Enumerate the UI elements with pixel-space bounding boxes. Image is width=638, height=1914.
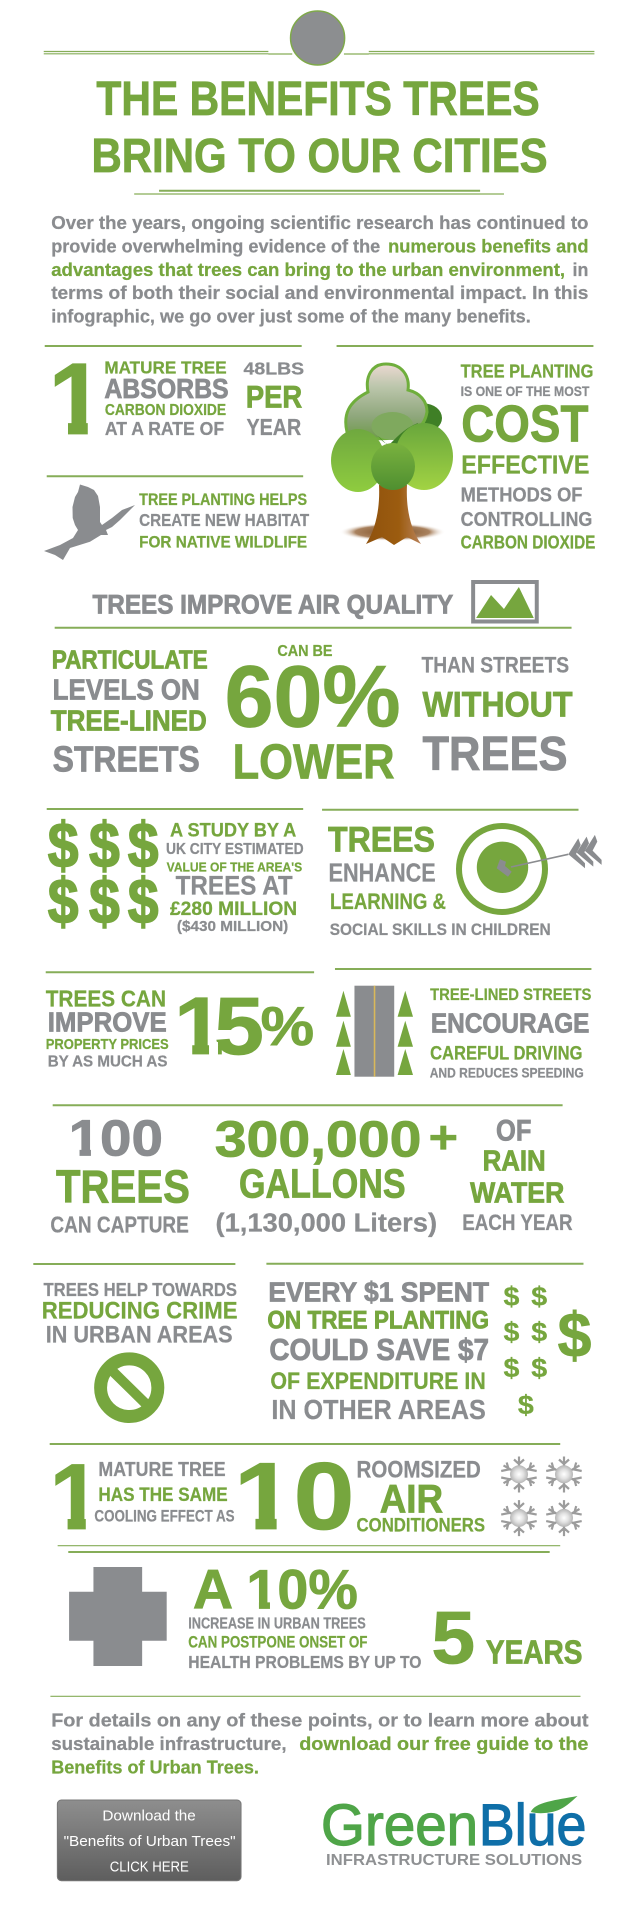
icon: small and large dollar signs: $: [531, 1281, 547, 1312]
panel: property prices: BY AS MUCH AS: [48, 1054, 167, 1071]
icon: small and large dollar signs: $: [503, 1353, 519, 1383]
intro paragraph: numerous benefits and: [388, 235, 588, 257]
icon: small and large dollar signs: $: [503, 1281, 519, 1312]
panel: rain water: RAIN: [483, 1146, 546, 1178]
panel: tree value study: A STUDY BY A: [170, 820, 296, 842]
panel: cooling effect: CONDITIONERS: [357, 1515, 485, 1537]
panel: property prices: TREES CAN: [46, 986, 166, 1012]
icon: dollar signs: [48, 809, 159, 937]
panel: carbon absorption: ABSORBS: [104, 373, 229, 404]
icon: grey medallion: [291, 11, 345, 65]
panel: careful driving: [430, 985, 591, 1080]
icon: snowflakes: [501, 1456, 582, 1536]
panel: learning: [328, 821, 551, 939]
panel: tree value study: £280 MILLION: [170, 898, 297, 920]
panel: learning: LEARNING &: [330, 889, 446, 914]
panel: careful driving: AND REDUCES SPEEDING: [430, 1064, 584, 1080]
intro paragraph: terms of both their social and environmental impact. In this: [51, 282, 588, 303]
panel: learning: SOCIAL SKILLS IN CHILDREN: [330, 920, 551, 939]
icon: medical cross: [69, 1567, 167, 1666]
panel: habitat text: TREE PLANTING HELPS: [139, 490, 307, 509]
panel: health: [188, 1558, 582, 1679]
button: download: [57, 1800, 241, 1881]
panel: tree value study: UK CITY ESTIMATED: [166, 841, 304, 858]
panel: cost effective: CARBON DIOXIDE: [461, 531, 595, 552]
panel: careful driving: CAREFUL DRIVING: [430, 1042, 582, 1064]
heading: air quality: TREES IMPROVE AIR QUALITY: [92, 589, 453, 619]
panel: health: HEALTH PROBLEMS BY UP TO: [188, 1652, 421, 1672]
panel: rain water: GALLONS: [239, 1161, 406, 1207]
panel: cooling effect: COOLING EFFECT AS: [94, 1507, 235, 1526]
icon: dollar signs: $: [89, 865, 120, 937]
panel: reducing crime: IN URBAN AREAS: [46, 1322, 233, 1349]
panel: cost effective: CONTROLLING: [461, 509, 592, 531]
panel: return on spending: IN OTHER AREAS: [271, 1394, 486, 1425]
panel: carbon absorption: AT A RATE OF: [105, 418, 224, 439]
panel: rain water: TREES: [56, 1160, 190, 1212]
intro paragraph: [51, 212, 588, 327]
panel: particulate levels: PARTICULATE: [52, 646, 208, 674]
panel: careful driving: ENCOURAGE: [431, 1007, 589, 1038]
intro paragraph: advantages that trees can bring to the urban environment,: [51, 259, 565, 280]
panel: rain water: +: [428, 1111, 458, 1163]
icon: small and large dollar signs: [503, 1281, 591, 1420]
panel: cooling effect: 10: [234, 1442, 355, 1549]
icon: small and large dollar signs: $: [503, 1317, 519, 1347]
icon: small and large dollar signs: $: [531, 1353, 547, 1383]
panel: particulate levels: CAN BE: [277, 643, 332, 660]
icon: leaf swoosh: [531, 1796, 578, 1813]
panel: cooling effect: 1: [49, 1444, 101, 1549]
panel: return on spending: OF EXPENDITURE IN: [270, 1368, 486, 1395]
panel: habitat text: CREATE NEW HABITAT: [139, 510, 309, 530]
panel: tree value study: VALUE OF THE AREA'S: [167, 860, 303, 875]
panel: careful driving: TREE-LINED STREETS: [430, 985, 591, 1004]
panel: health: A 10%: [193, 1558, 358, 1620]
panel: rain water: [50, 1110, 573, 1238]
icon: dollar signs: $: [89, 809, 120, 881]
button: download: CLICK HERE: [110, 1860, 189, 1876]
panel: cost effective: IS ONE OF THE MOST: [461, 384, 590, 399]
panel: health: CAN POSTPONE ONSET OF: [188, 1633, 367, 1651]
panel: property prices: PROPERTY PRICES: [46, 1037, 169, 1053]
panel: habitat text: [139, 490, 309, 552]
icon: tree: [331, 364, 453, 545]
panel: cooling effect: HAS THE SAME: [98, 1484, 228, 1506]
panel: particulate levels: [51, 643, 573, 789]
panel: learning: TREES: [328, 821, 435, 860]
intro paragraph: provide overwhelming evidence of the: [51, 235, 380, 257]
panel: cost effective: EFFECTIVE: [461, 451, 589, 479]
closing paragraph: Benefits of Urban Trees.: [51, 1756, 259, 1777]
panel: particulate levels: 60%: [225, 648, 401, 746]
panel: reducing crime: TREES HELP TOWARDS: [44, 1279, 237, 1300]
button: download: Download the: [102, 1809, 196, 1825]
icon: dollar signs: $: [128, 865, 159, 937]
panel: cooling effect: [45, 1442, 485, 1549]
panel: cost effective: COST: [461, 395, 589, 453]
panel: particulate levels: TREE-LINED: [51, 706, 207, 738]
icon: bird: [44, 484, 135, 560]
icon: dollar signs: $: [48, 809, 79, 881]
logo: GreenBlue: [321, 1794, 586, 1869]
icon: small and large dollar signs: $: [558, 1301, 591, 1371]
closing paragraph: download our free guide to the: [299, 1733, 588, 1754]
icon: tree-lined road: [336, 986, 413, 1077]
panel: particulate levels: STREETS: [53, 740, 200, 780]
panel: reducing crime: REDUCING CRIME: [42, 1297, 238, 1324]
panel: carbon absorption: PER: [246, 380, 302, 415]
panel: health: INCREASE IN URBAN TREES: [188, 1615, 366, 1632]
panel: return on spending: ON TREE PLANTING: [267, 1306, 489, 1334]
panel: cost effective: METHODS OF: [461, 484, 582, 506]
panel: rain water: WATER: [470, 1178, 564, 1210]
panel: rain water: OF: [496, 1115, 531, 1148]
icon: prohibition sign: [101, 1359, 158, 1416]
logo: GreenBlue: Blue: [479, 1794, 586, 1858]
panel: particulate levels: LOWER: [233, 734, 395, 789]
panel: particulate levels: TREES: [422, 727, 568, 781]
panel: return on spending: [267, 1277, 489, 1425]
panel: rain water: CAN CAPTURE: [50, 1211, 189, 1237]
button: download: "Benefits of Urban Trees": [64, 1834, 236, 1850]
panel: carbon absorption: MATURE TREE: [104, 357, 227, 377]
panel: carbon absorption: CARBON DIOXIDE: [105, 402, 226, 419]
icon: dollar signs: $: [48, 865, 79, 937]
panel: property prices: [46, 981, 314, 1072]
panel: carbon absorption: [44, 342, 304, 456]
panel: cooling effect: AIR: [380, 1478, 443, 1522]
panel: property prices: IMPROVE: [48, 1007, 167, 1038]
intro paragraph: Over the years, ongoing scientific research has continued to: [51, 212, 588, 233]
panel: cost effective: TREE PLANTING: [461, 361, 593, 382]
panel: carbon absorption: 1: [48, 342, 105, 456]
panel: cost effective: [461, 361, 595, 552]
panel: property prices: 15: [174, 981, 264, 1072]
panel: health: YEARS: [486, 1633, 582, 1670]
panel: rain water: 300,000: [215, 1111, 421, 1168]
panel: return on spending: COULD SAVE $7: [269, 1333, 489, 1367]
panel: tree value study: ($430 MILLION): [177, 919, 288, 935]
panel: particulate levels: LEVELS ON: [53, 674, 200, 706]
panel: cooling effect: MATURE TREE: [98, 1459, 226, 1481]
icon: small and large dollar signs: $: [518, 1390, 534, 1420]
intro paragraph: infographic, we go over just some of the many benefits.: [51, 305, 531, 327]
panel: habitat text: FOR NATIVE WILDLIFE: [139, 533, 307, 552]
title: BRING TO OUR CITIES: [91, 130, 548, 183]
title: THE BENEFITS TREES: [96, 73, 540, 126]
closing paragraph: sustainable infrastructure,: [51, 1733, 287, 1754]
icon: landscape picture: [473, 582, 537, 622]
panel: property prices: %: [261, 996, 314, 1057]
logo: GreenBlue: INFRASTRUCTURE SOLUTIONS: [326, 1852, 582, 1869]
panel: rain water: 100: [69, 1110, 163, 1167]
closing paragraph: [51, 1710, 588, 1777]
icon: target and arrow: [459, 826, 602, 912]
closing paragraph: For details on any of these points, or to learn more about: [51, 1710, 588, 1731]
panel: rain water: EACH YEAR: [462, 1210, 573, 1235]
panel: particulate levels: WITHOUT: [422, 686, 573, 725]
panel: rain water: (1,130,000 Liters): [215, 1210, 437, 1238]
panel: carbon absorption: YEAR: [247, 414, 302, 440]
panel: learning: ENHANCE: [329, 860, 436, 888]
title: [91, 73, 548, 183]
panel: return on spending: EVERY $1 SPENT: [268, 1277, 489, 1308]
panel: tree value study: TREES AT: [176, 870, 293, 900]
panel: health: 5: [431, 1596, 475, 1679]
icon: dollar signs: $: [128, 809, 159, 881]
panel: cooling effect: ROOMSIZED: [357, 1457, 481, 1483]
panel: carbon absorption: 48LBS: [244, 358, 304, 378]
panel: tree value study: [166, 820, 304, 935]
intro paragraph: in: [573, 259, 588, 280]
panel: particulate levels: THAN STREETS: [421, 653, 569, 678]
icon: small and large dollar signs: $: [531, 1317, 547, 1347]
logo: GreenBlue: Green: [321, 1794, 478, 1858]
panel: reducing crime: [42, 1279, 238, 1349]
header ornament: [44, 11, 594, 65]
